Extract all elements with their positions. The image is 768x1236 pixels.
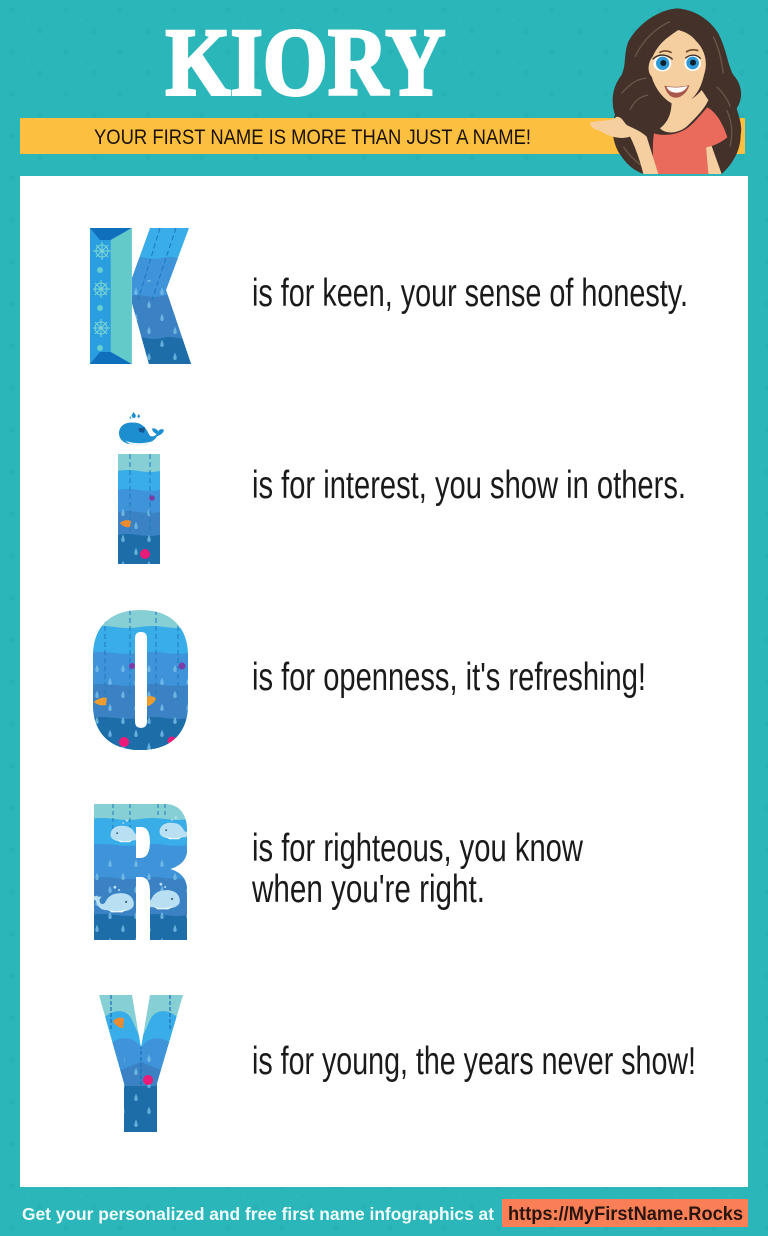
banner	[20, 118, 745, 154]
hair	[613, 8, 741, 174]
smile	[664, 85, 689, 98]
text: R lines: is for righteous, you know	[252, 827, 584, 870]
letter I	[118, 412, 164, 570]
text: O line: is for openness, it's refreshing!	[252, 656, 646, 699]
K arm	[132, 228, 191, 364]
hair highlights	[622, 22, 732, 167]
text: R lines: when you're right.	[251, 868, 485, 911]
neck and chest	[660, 90, 708, 132]
face	[649, 30, 706, 105]
K stem	[90, 228, 132, 364]
arm and hand	[590, 117, 658, 174]
banner: YOUR FIRST NAME IS MORE THAN JUST A NAME!	[94, 126, 531, 149]
letter O	[90, 608, 190, 755]
letter Y	[99, 995, 183, 1132]
letter R	[94, 804, 187, 940]
title: KIORY	[166, 8, 446, 116]
I bar	[118, 454, 160, 570]
main white panel	[20, 176, 748, 1187]
footer link badge: https://MyFirstName.Rocks	[508, 1204, 743, 1225]
eyes	[653, 50, 701, 71]
character illustration	[590, 8, 741, 174]
whale icon	[119, 412, 164, 445]
right arm	[706, 146, 722, 174]
letter K	[90, 228, 195, 370]
footer call to action: Get your personalized and free first name infographics at	[22, 1204, 494, 1224]
text: R lines	[251, 827, 584, 911]
top	[653, 107, 727, 174]
